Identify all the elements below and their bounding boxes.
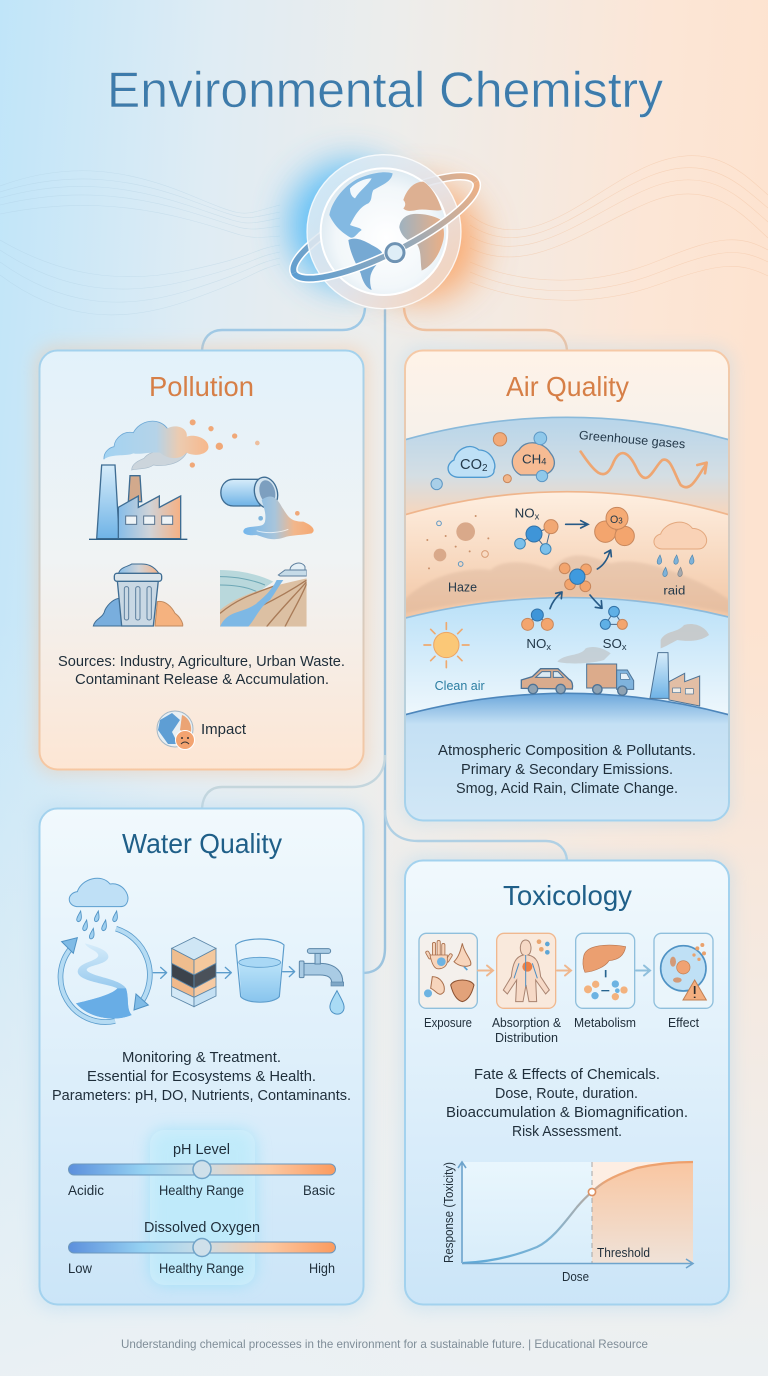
text: toxicology summary: Bioaccumulation & Biomagnification. bbox=[446, 1104, 688, 1121]
molecule: NOx lower: x bbox=[546, 642, 551, 652]
molecule: NOx upper: x bbox=[535, 511, 540, 521]
text: air quality summary: Primary & Secondary Emissions. bbox=[461, 761, 673, 778]
text: water summary: Parameters: pH, DO, Nutrients, Contaminants. bbox=[52, 1087, 351, 1104]
step: metabolism: Metabolism bbox=[574, 1016, 636, 1030]
text: toxicology summary bbox=[446, 1066, 688, 1140]
connector lines bbox=[202, 308, 567, 973]
molecule: O3 bbox=[595, 507, 634, 546]
chart: dose-response curve bbox=[442, 1162, 693, 1284]
title: Environmental Chemistry bbox=[107, 62, 663, 118]
icon: glass of water bbox=[236, 939, 284, 1002]
step: effect: Effect bbox=[668, 1016, 700, 1030]
step: effect bbox=[654, 933, 713, 1030]
text: pollution sources: Sources: Industry, Agriculture, Urban Waste. bbox=[58, 653, 345, 670]
molecule: SOx: SO bbox=[603, 636, 622, 651]
icon: truck bbox=[587, 664, 634, 695]
icon: small factory bbox=[650, 624, 709, 706]
arrows: water treatment flow bbox=[153, 967, 295, 978]
atmosphere layers bbox=[406, 416, 728, 777]
molecule: SOx bbox=[600, 606, 627, 652]
chart: dose-response curve: Response (Toxicity) bbox=[442, 1162, 456, 1263]
arrow: heat wave bbox=[581, 452, 707, 487]
arrow bbox=[478, 966, 493, 976]
molecule: NOx lower: NO bbox=[526, 636, 546, 651]
molecule: NOx upper bbox=[515, 505, 558, 554]
step: absorption and distribution: Absorption & bbox=[492, 1016, 562, 1030]
chart: dose-response curve: Threshold bbox=[597, 1246, 650, 1260]
icon: globe with orbit ring bbox=[282, 155, 488, 309]
molecule: central bbox=[559, 563, 591, 592]
greenhouse gases layer: 2 bbox=[482, 463, 488, 474]
text: air quality summary: Atmospheric Composition & Pollutants. bbox=[438, 742, 696, 759]
icon: acid rain cloud bbox=[654, 522, 707, 577]
heading: Water Quality: Water Quality bbox=[122, 828, 282, 859]
slider: pH level: pH Level bbox=[173, 1141, 230, 1158]
slider: dissolved oxygen: Low bbox=[68, 1260, 93, 1276]
panel: Pollution bbox=[34, 345, 369, 775]
text: pollution sources: Contaminant Release & Accumulation. bbox=[75, 671, 329, 688]
panel: Air Quality bbox=[400, 345, 734, 833]
label: Clean air: Clean air bbox=[435, 679, 485, 693]
step: absorption and distribution: Distribution bbox=[495, 1031, 558, 1045]
arrow bbox=[636, 966, 650, 976]
greenhouse gases layer bbox=[431, 428, 707, 490]
slider: pH level bbox=[68, 1141, 336, 1198]
step: exposure: Exposure bbox=[424, 1016, 472, 1030]
icon: tap with drop bbox=[299, 949, 344, 1014]
label: Haze: Haze bbox=[448, 581, 477, 595]
haze layer bbox=[426, 505, 707, 609]
text: water summary: Essential for Ecosystems & Health. bbox=[87, 1068, 316, 1085]
footer: Understanding chemical processes in the environment for a sustainable future. | Educational Resource bbox=[121, 1337, 648, 1351]
chart: dose-response curve: Dose bbox=[562, 1270, 589, 1284]
icon: car bbox=[521, 669, 573, 694]
arrows: reactions bbox=[550, 550, 611, 609]
slider: dissolved oxygen: Healthy Range bbox=[159, 1260, 244, 1276]
text: toxicology summary: Fate & Effects of Chemicals. bbox=[474, 1066, 660, 1083]
healthy range highlight bbox=[150, 1130, 255, 1285]
molecule: NOx upper: NO bbox=[515, 505, 535, 520]
icon: filter block bbox=[172, 937, 216, 1007]
icon: sun bbox=[424, 623, 469, 668]
heading: Toxicology: Toxicology bbox=[503, 880, 632, 911]
text: toxicology summary: Dose, Route, duration. bbox=[495, 1085, 638, 1102]
slider: pH level: Basic bbox=[303, 1182, 335, 1198]
text: water summary: Monitoring & Treatment. bbox=[122, 1049, 281, 1066]
text: air quality summary: Smog, Acid Rain, Climate Change. bbox=[456, 780, 678, 797]
step: metabolism bbox=[574, 933, 636, 1030]
icon: trash bin bbox=[93, 564, 183, 626]
slider: dissolved oxygen bbox=[68, 1219, 336, 1276]
greenhouse gases layer: 4 bbox=[541, 457, 546, 467]
molecule: O3: O bbox=[610, 514, 618, 526]
icon: factory with smoke bbox=[89, 419, 260, 539]
slider: dissolved oxygen: High bbox=[309, 1260, 335, 1276]
label: Impact: Impact bbox=[201, 721, 247, 738]
icon: farmland runoff bbox=[220, 563, 307, 627]
panel: Toxicology bbox=[400, 855, 734, 1311]
label: raid: raid bbox=[663, 584, 685, 598]
arrow bbox=[557, 966, 571, 976]
text: pollution sources bbox=[58, 653, 345, 688]
arrow: to ozone bbox=[566, 521, 588, 528]
slider: dissolved oxygen: Dissolved Oxygen bbox=[144, 1219, 260, 1236]
lower air layer bbox=[424, 606, 709, 706]
heading: Air Quality: Air Quality bbox=[506, 371, 629, 402]
molecule: NOx lower bbox=[522, 609, 553, 652]
step: absorption and distribution bbox=[492, 933, 562, 1045]
panel: Water Quality bbox=[34, 803, 369, 1311]
icon: impact globe bbox=[157, 711, 194, 750]
text: toxicology summary: Risk Assessment. bbox=[512, 1123, 622, 1140]
step: exposure bbox=[419, 933, 477, 1030]
smoke bbox=[557, 647, 611, 663]
slider: pH level: Acidic bbox=[68, 1182, 104, 1198]
greenhouse gases layer: CH bbox=[522, 451, 541, 466]
heading: Pollution: Pollution bbox=[149, 371, 254, 402]
greenhouse gases layer: CO bbox=[460, 457, 482, 473]
slider: pH level: Healthy Range bbox=[159, 1182, 244, 1198]
icon: water cycle bbox=[60, 878, 150, 1022]
label: Greenhouse gases: Greenhouse gases bbox=[578, 428, 686, 451]
icon: discharge pipe bbox=[221, 475, 314, 539]
molecule: O3: 3 bbox=[618, 517, 623, 526]
decorative wave lines bbox=[0, 156, 768, 315]
text: air quality summary bbox=[438, 742, 696, 797]
text: water summary bbox=[52, 1049, 351, 1104]
molecule: SOx: x bbox=[622, 642, 627, 652]
